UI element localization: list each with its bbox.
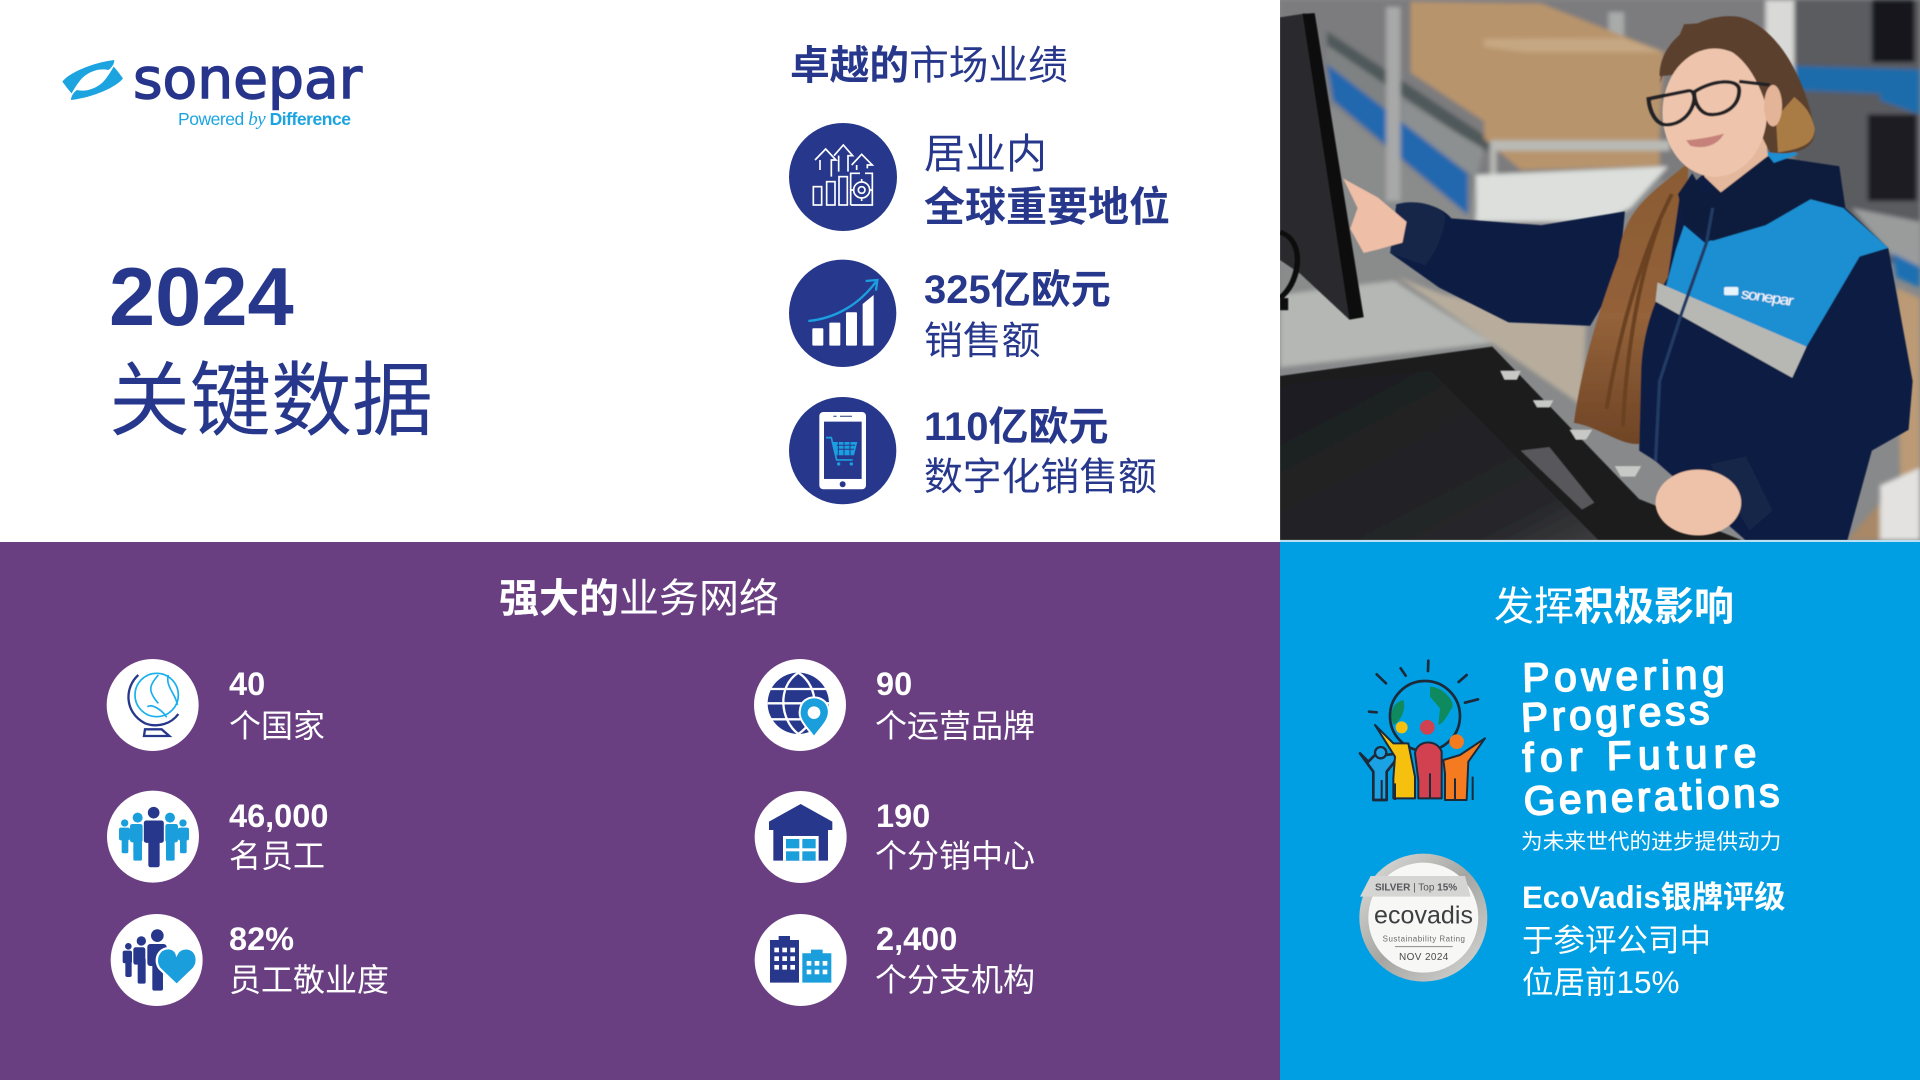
text: branches [875, 921, 1035, 998]
text: branches: 个分支机构 [875, 962, 1035, 998]
icon: digital sales phone [789, 397, 896, 504]
text: distribution centers: 个分销中心 [875, 838, 1035, 874]
panel: business network [0, 542, 1280, 1080]
logo: sonepar: sonepar [133, 47, 363, 112]
icon: globe [107, 659, 199, 751]
heading: market performance: 卓越的市场业绩 [790, 44, 1068, 88]
heading: 2024 key data: 关键数据 [109, 357, 433, 447]
badge: ecovadis silver: ecovadis [1374, 901, 1473, 929]
panel: key figures intro [0, 0, 1280, 542]
logo: sonepar: Powered by Difference [178, 109, 351, 130]
slogan: powering progress for future generations: Powering [1522, 651, 1725, 701]
text: countries: 个国家 [229, 708, 325, 744]
text: global position [924, 131, 1170, 230]
text: ecovadis rating [1522, 880, 1785, 1000]
text: engagement: 员工敬业度 [229, 962, 389, 998]
text: brands: 个运营品牌 [875, 708, 1035, 744]
text: sales [924, 268, 1111, 363]
icon: sales growth [789, 260, 896, 367]
text: ecovadis rating: 位居前15% [1522, 964, 1680, 1000]
icon: distribution center [755, 791, 847, 883]
text: employees [229, 798, 328, 874]
text: ecovadis rating: EcoVadis银牌评级 [1522, 880, 1785, 915]
logo: sonepar [62, 47, 363, 130]
icon: global position chart [789, 123, 897, 231]
text: digital sales [924, 405, 1157, 499]
text: engagement [229, 921, 389, 998]
heading: positive impact: 发挥积极影响 [1494, 585, 1734, 629]
photo: employee at workstation [1280, 0, 1920, 540]
badge: ecovadis silver: Sustainability Rating [1383, 934, 1465, 943]
text: branches: 2,400 [876, 921, 957, 957]
icon: branches [755, 914, 847, 1006]
slogan: powering progress for future generations: for Future [1522, 730, 1757, 781]
text: employees: 名员工 [229, 838, 325, 874]
text: employees: 46,000 [229, 798, 328, 834]
text: slogan translation: 为未来世代的进步提供动力 [1521, 829, 1781, 854]
photo: employee at workstation: sonepar [1740, 286, 1796, 310]
icon: employee engagement [111, 914, 203, 1006]
badge: ecovadis silver: NOV 2024 [1399, 952, 1449, 963]
panel: positive impact [1280, 542, 1920, 1080]
text: engagement: 82% [229, 921, 294, 957]
text: sales: 销售额 [924, 320, 1040, 363]
text: countries [229, 666, 325, 744]
slogan: powering progress for future generations [1520, 651, 1780, 824]
slogan: powering progress for future generations: Generations [1523, 769, 1780, 824]
text: brands [875, 666, 1035, 744]
text: digital sales: 数字化销售额 [924, 456, 1157, 499]
text: distribution centers: 190 [876, 798, 930, 834]
text: digital sales: 110亿欧元 [924, 405, 1109, 449]
badge: ecovadis silver [1359, 854, 1487, 982]
text: global position: 全球重要地位 [924, 184, 1170, 230]
heading: strong network: 强大的业务网络 [499, 577, 779, 621]
heading: 2024 key data [109, 250, 433, 447]
text: global position: 居业内 [924, 131, 1047, 177]
text: distribution centers [875, 798, 1035, 874]
heading: 2024 key data: 2024 [109, 250, 294, 343]
text: brands: 90 [876, 666, 912, 702]
text: ecovadis rating: 于参评公司中 [1522, 922, 1711, 958]
icon: globe with pin [754, 659, 846, 751]
text: sales: 325亿欧元 [924, 268, 1111, 312]
icon: employees [107, 791, 199, 883]
icon: family and earth [1360, 661, 1485, 800]
badge: ecovadis silver: SILVER | Top 15% [1375, 882, 1457, 893]
slogan: powering progress for future generations: Progress [1520, 686, 1710, 741]
text: countries: 40 [229, 666, 265, 702]
